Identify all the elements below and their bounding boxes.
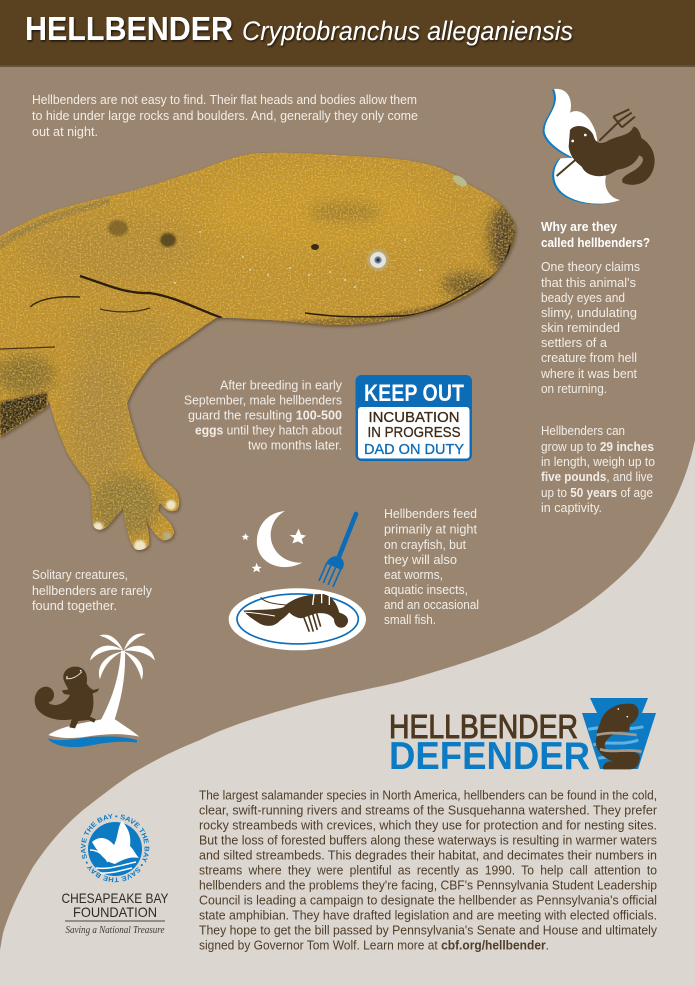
logo: hellbender defender: DEFENDER (389, 735, 590, 778)
intro text: Hellbenders are not easy to find. Their flat heads and bodies allow them (32, 93, 417, 107)
text: feeding: aquatic insects, (384, 583, 468, 597)
logo: hellbender defender: HELLBENDER (389, 708, 578, 745)
text: size facts (541, 424, 655, 515)
text: size facts: grow up to 29 inches (541, 440, 654, 454)
text: feeding: eat worms, (384, 568, 443, 582)
sign: keep out: DAD ON DUTY (364, 441, 464, 458)
nostril (451, 173, 469, 189)
text: body paragraph: But the loss of forested buffers along these waterways is resulting in warmer waters (199, 832, 657, 848)
heading: why are they called hellbenders: Why are they (541, 220, 617, 234)
text: theory (540, 260, 640, 396)
text: feeding: on crayfish, but (384, 538, 466, 552)
text: body paragraph: Council is leading a campaign to designate the hellbender as Pennsylvania's official (199, 892, 657, 908)
icon: hellbender devil in flames (543, 89, 655, 204)
title (25, 10, 573, 47)
text: breeding: eggs until they hatch about (195, 424, 342, 438)
sign: keep out: INCUBATION (368, 409, 460, 426)
speckles (174, 231, 421, 288)
heading: why are they called hellbenders (541, 220, 650, 250)
text: size facts: Hellbenders can (541, 424, 625, 438)
text: feeding (384, 507, 479, 627)
text: solitary: found together. (32, 599, 117, 613)
text: feeding: and an occasional (384, 598, 479, 612)
logo: chesapeake bay foundation: FOUNDATION (73, 904, 157, 920)
seal: • SAVE THE BAY • SAVE THE BAY • SAVE THE BAY (80, 814, 150, 882)
logo: chesapeake bay foundation: Saving a National Treasure (66, 925, 165, 936)
text: theory: skin reminded (541, 321, 620, 335)
text: size facts: in length, weigh up to (541, 455, 655, 469)
intro text (32, 93, 418, 139)
text: theory: beady eyes and (541, 291, 625, 305)
text: feeding: they will also (384, 553, 457, 567)
text: body paragraph: streams where they were plentiful as recently as 1990. To help call attention to (199, 862, 657, 878)
logo: hellbender defender (389, 698, 656, 778)
text: body paragraph: They hope to get the bill passed by Pennsylvania's Senate and House and ultimately (199, 922, 658, 938)
text: theory: that this animal's (541, 276, 636, 290)
text: breeding: guard the resulting 100-500 (188, 408, 342, 422)
text: theory: creature from hell (541, 351, 637, 365)
sign: keep out (356, 375, 472, 461)
text: body paragraph: clear, swift-running rivers and streams of the Susquehanna watershed. They prefer (199, 802, 658, 818)
text: body paragraph: hellbenders and the problems they're facing, CBF's Pennsylvania Student Leadership (199, 878, 657, 892)
heading: why are they called hellbenders: called hellbenders? (541, 236, 650, 250)
intro text: to hide under large rocks and boulders. And, generally they only come (32, 109, 418, 123)
text: feeding: primarily at night (384, 522, 478, 536)
text: body paragraph: The largest salamander species in North America, hellbenders can be found in the cold, (199, 788, 657, 802)
text: theory: slimy, undulating (541, 306, 637, 320)
eye (367, 249, 389, 271)
text: body paragraph: rocky streambeds with crevices, which they use for protection and for nesting sites. (199, 818, 657, 832)
text: body paragraph: signed by Governor Tom Wolf. Learn more at cbf.org/hellbender. (199, 938, 549, 952)
sign: keep out: IN PROGRESS (368, 424, 460, 441)
text: body paragraph: and silted streambeds. This degrades their habitat, and decimates their numbers in (199, 848, 657, 862)
icon: keystone (582, 698, 656, 769)
hellbender photo (0, 150, 521, 555)
logo: chesapeake bay foundation (62, 814, 169, 936)
text: solitary: Solitary creatures, (32, 568, 128, 582)
text: theory: where it was bent (540, 367, 637, 381)
header band (0, 0, 695, 67)
text: feeding: Hellbenders feed (384, 507, 477, 521)
text: breeding: two months later. (248, 438, 342, 452)
icon: hellbender on island (35, 633, 155, 747)
icon: plate with crayfish (229, 588, 366, 650)
text: feeding: small fish. (384, 613, 436, 627)
toe tips (166, 500, 176, 510)
text: breeding (184, 378, 343, 452)
light lower panel with S curve (0, 440, 695, 986)
intro text: out at night. (32, 125, 98, 139)
text: breeding: September, male hellbenders (184, 394, 342, 408)
title: HELLBENDER (25, 10, 233, 47)
text: body paragraph: state amphibian. They have drafted legislation and are meeting with elected officials. (199, 908, 657, 922)
title: Cryptobranchus alleganiensis (242, 16, 573, 46)
logo: chesapeake bay foundation: CHESAPEAKE BAY (62, 890, 169, 906)
text: size facts: in captivity. (541, 501, 602, 515)
sign: keep out: KEEP OUT (364, 380, 464, 407)
icon: fork (319, 514, 356, 587)
text: theory: on returning. (541, 382, 607, 396)
text: theory: One theory claims (541, 260, 640, 274)
text: theory: settlers of a (541, 336, 607, 350)
text: body paragraph (199, 788, 658, 952)
text: solitary: hellbenders are rarely (32, 584, 153, 598)
text: breeding: After breeding in early (220, 378, 343, 392)
text: size facts: five pounds, and live (541, 470, 653, 484)
text: solitary (32, 568, 153, 613)
text: size facts: up to 50 years of age (541, 486, 653, 500)
icon: moon and stars (242, 511, 306, 572)
